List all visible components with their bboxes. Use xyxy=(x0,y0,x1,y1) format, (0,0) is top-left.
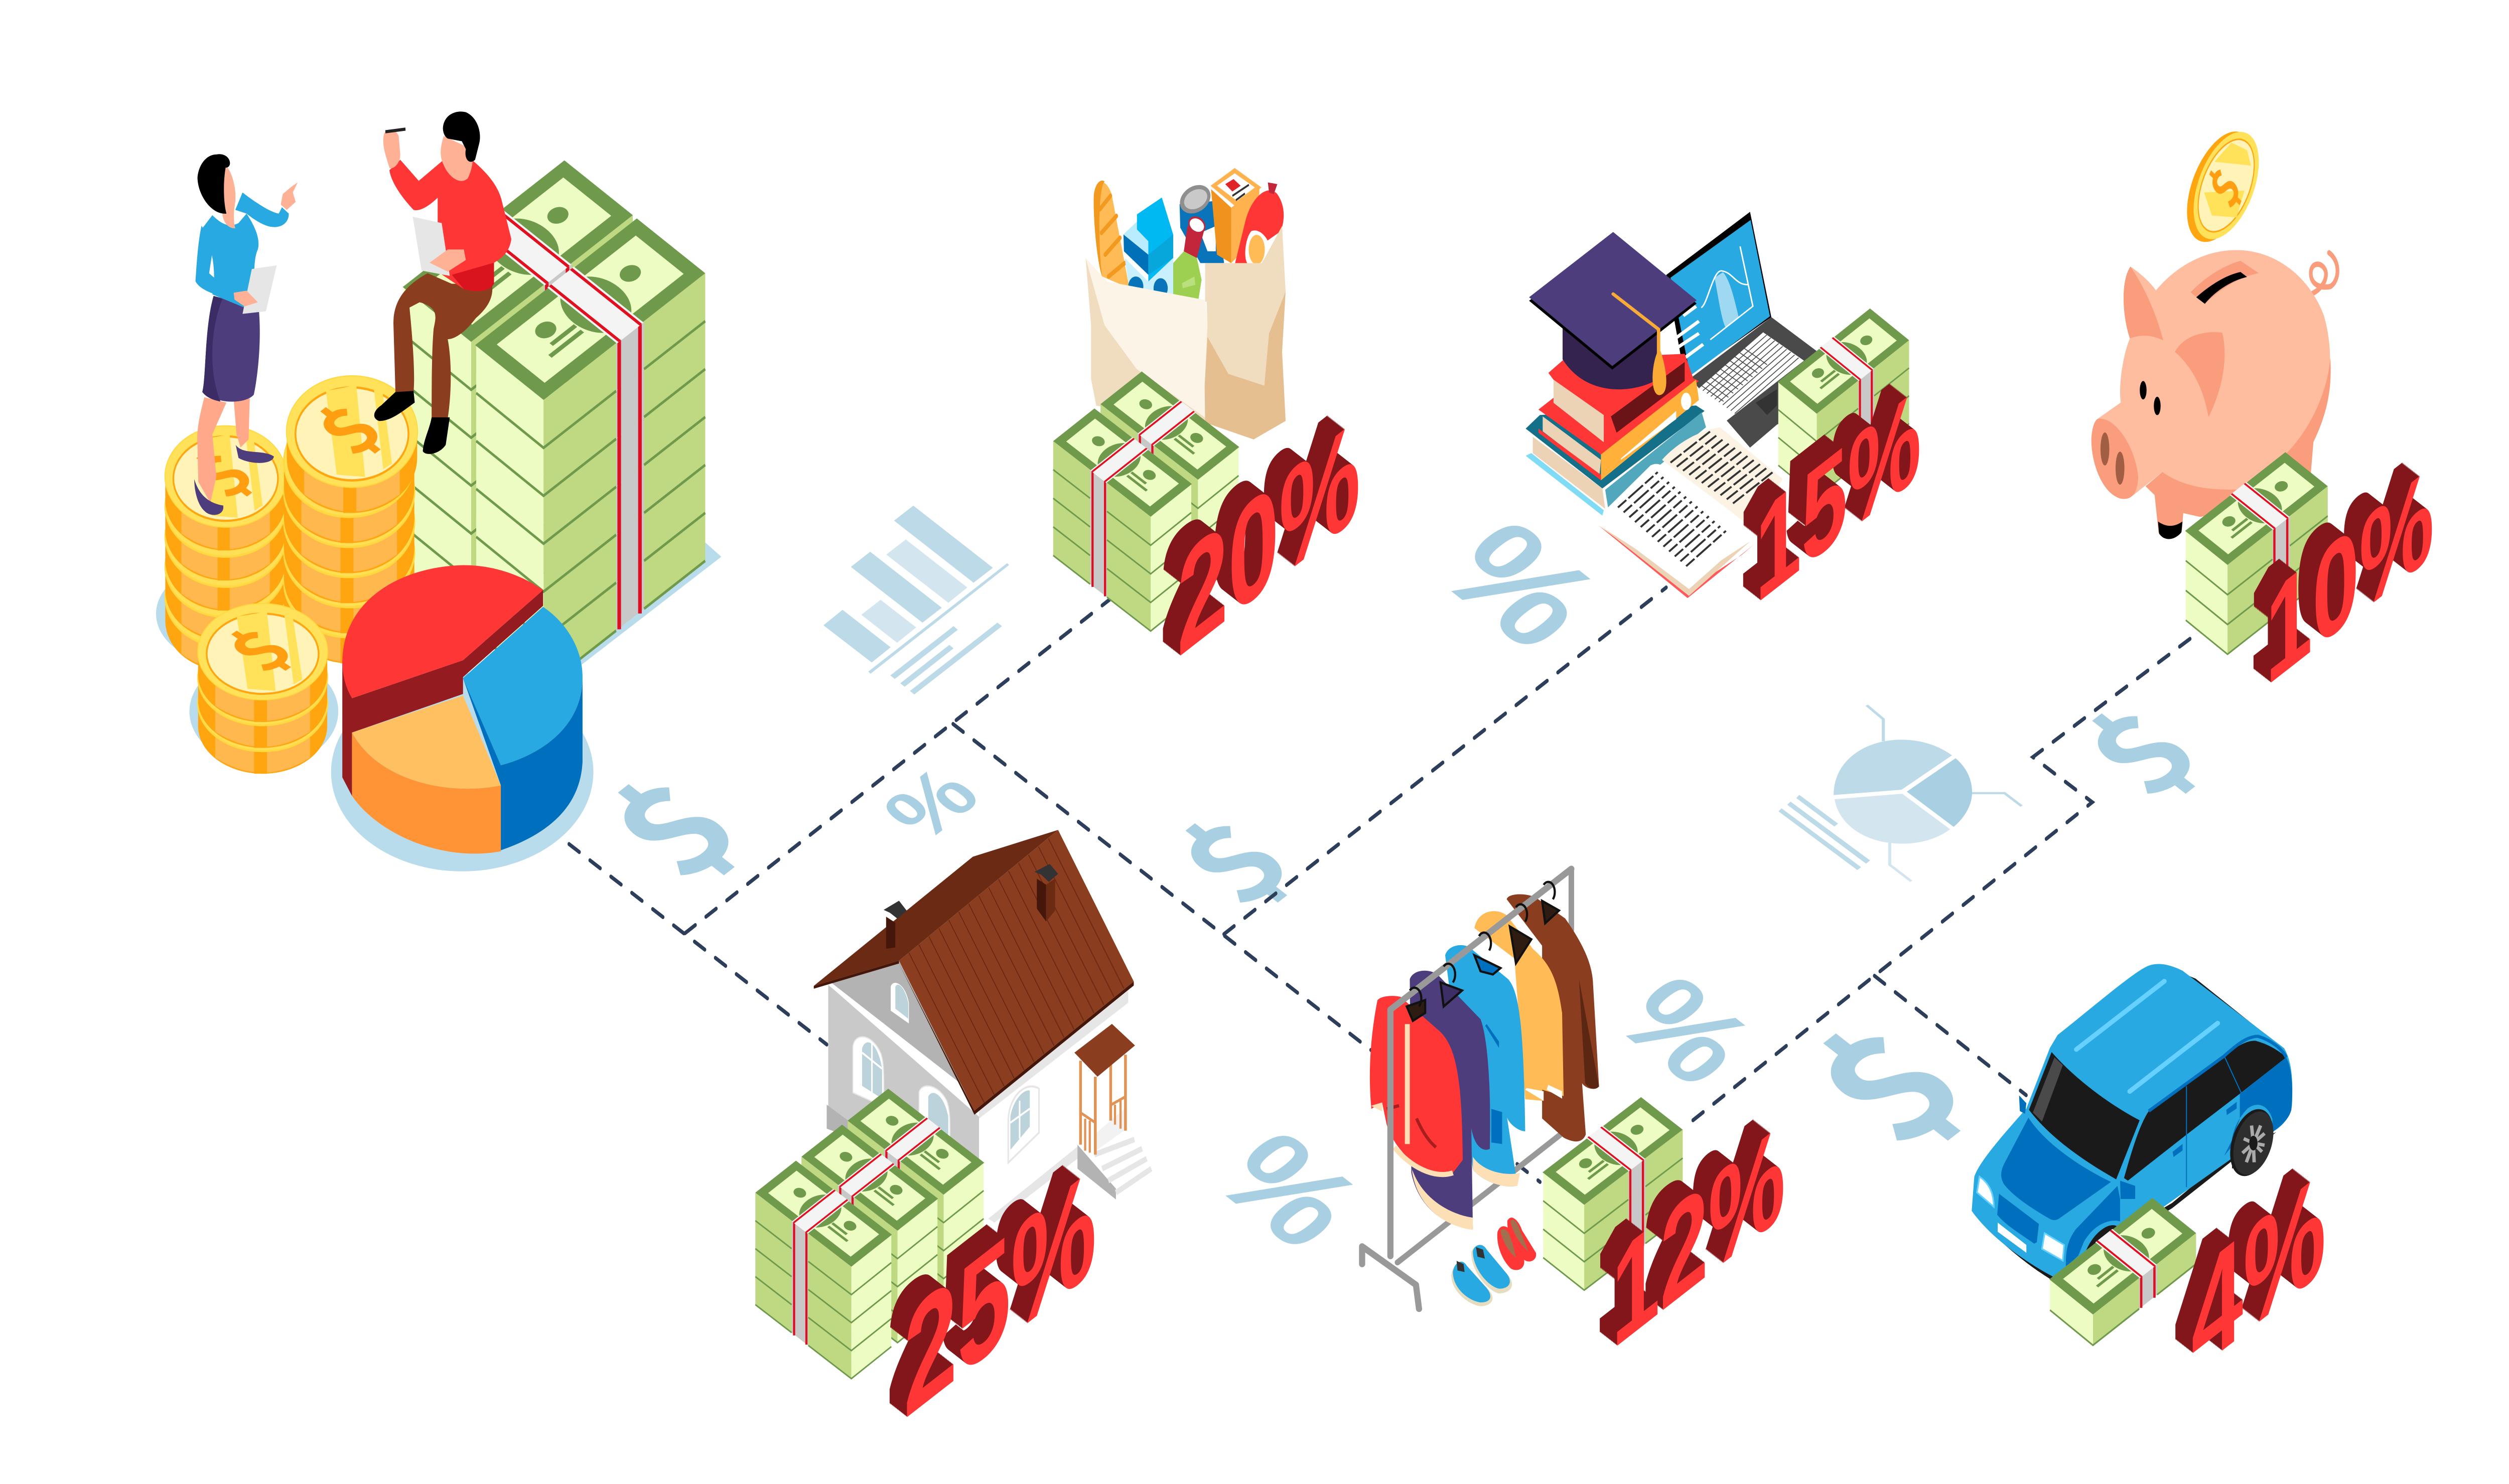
blue car with money xyxy=(1972,964,2292,1345)
icon: faint pie chart xyxy=(1778,705,2022,881)
graduation cap xyxy=(1529,232,1697,395)
grille and lights xyxy=(1977,1176,2064,1261)
ground glyph: dollar near pie: $ xyxy=(557,736,780,911)
book stack xyxy=(1525,354,1706,516)
bottle xyxy=(1173,215,1206,303)
eyes xyxy=(2140,381,2161,415)
rear roof edge xyxy=(2166,966,2271,1039)
ground glyph: large percent: % xyxy=(1408,497,1633,673)
snout xyxy=(2092,419,2138,499)
man sitting on money xyxy=(374,111,511,454)
woman on coins xyxy=(194,154,298,515)
percentage label: 12% clothing: 12% xyxy=(1612,1093,1785,1379)
windows xyxy=(2029,1036,2286,1187)
house with money stack xyxy=(755,830,1151,1379)
middle coin stack xyxy=(284,376,417,663)
can xyxy=(1178,181,1224,263)
isometric pie chart xyxy=(331,565,594,871)
shoes xyxy=(1451,1218,1536,1306)
coin shadow xyxy=(156,563,297,664)
percentage label: 25% housing: 25% xyxy=(904,1133,1096,1452)
money stack xyxy=(1542,1097,1683,1290)
education: laptop, books, cap and money xyxy=(1525,212,1909,598)
ground glyph: dollar near car: $ xyxy=(1751,977,2013,1182)
windows xyxy=(853,983,1039,1162)
pig body xyxy=(2098,250,2330,496)
money stacks xyxy=(1053,371,1239,631)
percentage label: 10% savings: 10% xyxy=(2266,436,2434,715)
chimneys xyxy=(884,864,1058,949)
paper bag back xyxy=(1205,226,1283,302)
baguette xyxy=(1094,182,1130,288)
wheels xyxy=(2086,1104,2281,1253)
falling coin: $ xyxy=(2196,150,2251,221)
dashed connector network xyxy=(548,587,2193,1182)
blue coat xyxy=(1445,945,1525,1186)
percentage label: 20% groceries: 20% xyxy=(1177,386,1360,689)
piggy bank with falling coin and money xyxy=(2092,113,2337,654)
rack front parts xyxy=(1362,869,1571,1309)
car body xyxy=(1972,964,2292,1279)
orange box xyxy=(1210,168,1262,263)
ground glyph: percent left of clothes: % xyxy=(1186,1110,1392,1271)
yellow coat xyxy=(1474,911,1564,1101)
ground glyph: dollar near piggy bank: $ xyxy=(2038,671,2235,825)
hero: money, coins, pie chart and two people xyxy=(156,111,721,871)
roof xyxy=(814,830,1134,1115)
small coin stack xyxy=(190,604,338,774)
right wall edge xyxy=(979,991,1128,1119)
ground glyph: percent under junction: % xyxy=(865,752,998,855)
sausage xyxy=(1235,183,1284,265)
stack shadow xyxy=(532,542,721,672)
purple coat xyxy=(1410,971,1490,1229)
left wall xyxy=(828,985,979,1227)
porch and steps xyxy=(1074,1024,1151,1200)
groceries with money stack xyxy=(1053,168,1286,631)
brown coat xyxy=(1507,894,1599,1141)
money stacks xyxy=(755,1088,985,1379)
hangers xyxy=(1407,882,1559,1021)
ground glyph: dollar centre: $ xyxy=(1133,782,1326,933)
red coat xyxy=(1370,996,1463,1174)
ground glyph: percent above clothes money: % xyxy=(1589,955,1783,1106)
falling coin xyxy=(2173,113,2272,260)
left coin stack xyxy=(165,426,286,671)
money stack xyxy=(2185,452,2328,654)
milk carton xyxy=(1124,198,1173,299)
icon: faint bar chart xyxy=(823,506,1009,694)
roof highlights xyxy=(2076,981,2218,1091)
money stack xyxy=(2049,1198,2196,1345)
door handles and mirrors xyxy=(2019,1095,2237,1199)
percentage label: 4% car: 4% xyxy=(2191,1138,2326,1406)
paper bag front xyxy=(1085,226,1286,439)
tail xyxy=(2311,253,2337,294)
rack back parts xyxy=(1398,869,1571,1262)
clothes rack, shoes and money xyxy=(1362,869,1683,1309)
pig underside and legs xyxy=(2146,472,2252,538)
underbody xyxy=(1972,1132,2276,1280)
open book xyxy=(1598,427,1783,598)
ears xyxy=(2124,266,2163,340)
gable xyxy=(831,961,962,1085)
laptop xyxy=(1666,212,1817,448)
money stacks xyxy=(402,160,706,687)
percentage label: 15% education: 15% xyxy=(1755,358,1921,632)
coin slot xyxy=(2190,261,2259,304)
hood xyxy=(2001,1118,2111,1220)
money stack xyxy=(1777,308,1909,497)
